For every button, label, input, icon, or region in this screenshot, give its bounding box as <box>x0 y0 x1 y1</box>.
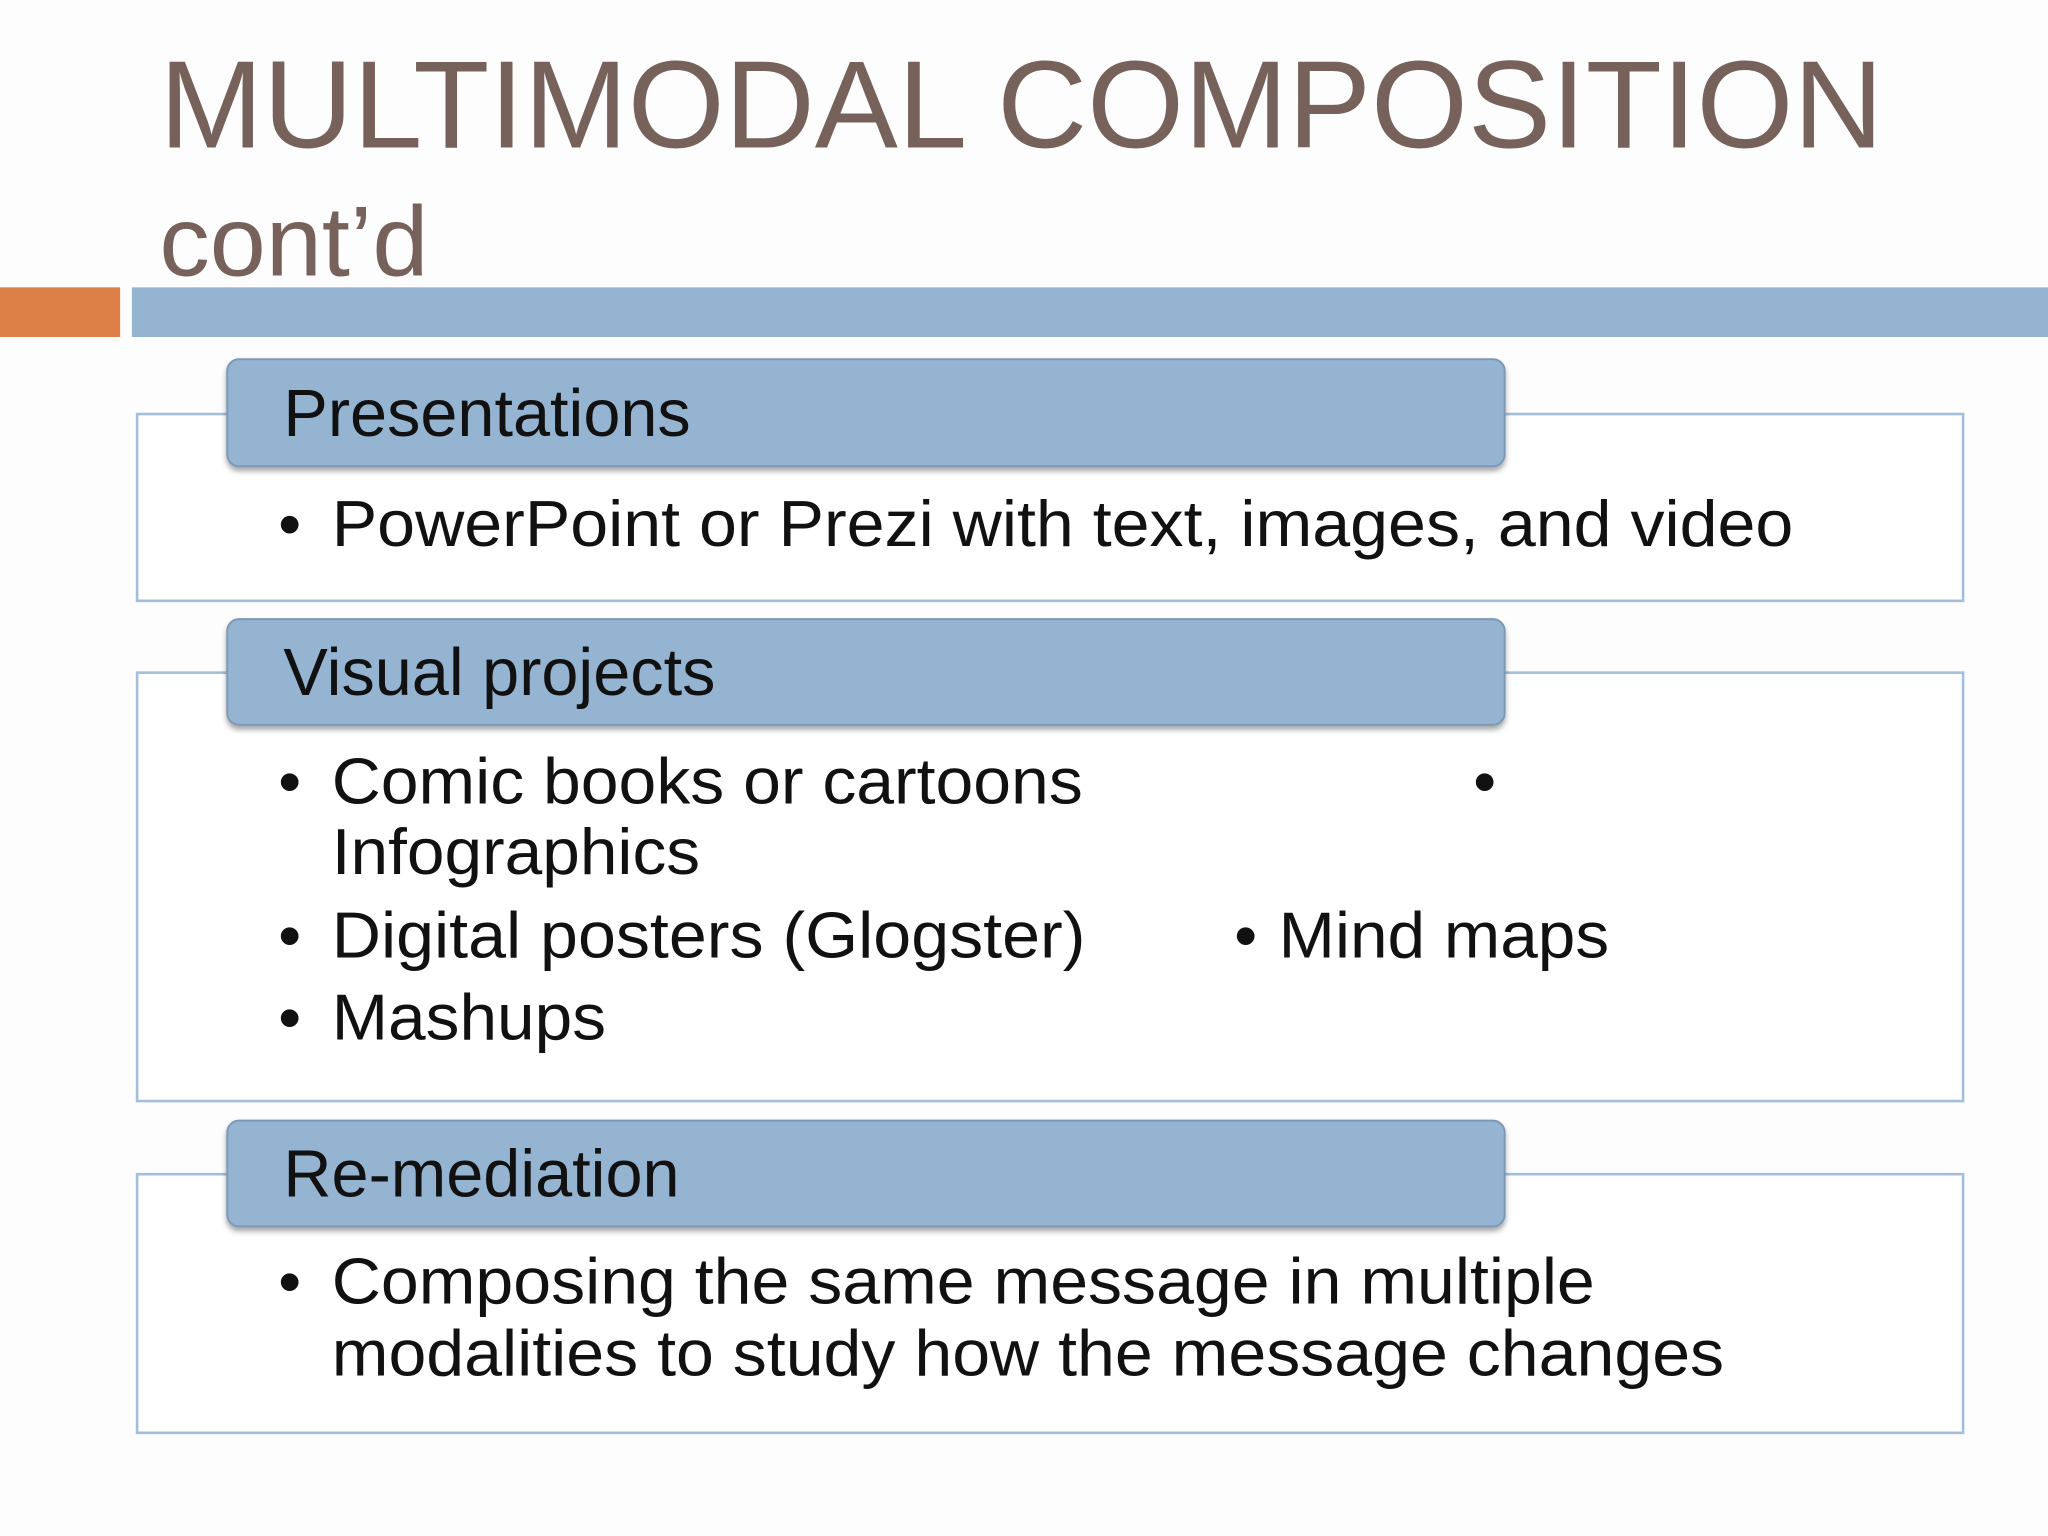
bullet list: Digital posters (Glogster) <box>332 898 1085 971</box>
panel: presentations <box>137 359 1963 601</box>
title <box>159 37 1883 298</box>
header: presentations <box>227 359 1505 466</box>
header: presentations: Presentations <box>283 377 691 451</box>
panel: re-mediation <box>137 1121 1963 1433</box>
bullet text: Composing the same message in multiple <box>332 1245 1595 1318</box>
bullet list: Infographics <box>332 815 700 888</box>
accent bar: orange <box>0 287 120 337</box>
bullet list: • <box>278 744 301 817</box>
bullet text: • <box>278 1245 301 1318</box>
bullet text: modalities to study how the message changes <box>332 1316 1724 1389</box>
bullet text <box>278 1245 1724 1389</box>
bullet list: Mashups <box>332 981 606 1054</box>
bullet list: Comic books or cartoons <box>332 744 1083 817</box>
panel: visual projects <box>137 619 1963 1101</box>
header: visual projects <box>227 619 1505 725</box>
title: cont’d <box>159 187 428 298</box>
bullet list: • <box>278 981 301 1054</box>
bullet list: • <box>1234 898 1257 971</box>
bullet list: • <box>278 898 301 971</box>
title: MULTIMODAL COMPOSITION <box>159 37 1883 175</box>
header: visual projects: Visual projects <box>283 636 715 710</box>
accent bar: blue <box>132 287 2048 337</box>
bullet text: PowerPoint or Prezi with text, images, and video <box>332 487 1793 560</box>
header: re-mediation <box>227 1121 1505 1226</box>
header: re-mediation: Re-mediation <box>283 1137 680 1211</box>
bullet list: • <box>1473 744 1496 817</box>
bullet text: • <box>278 487 301 560</box>
bullet list: Mind maps <box>1279 898 1609 971</box>
bullet list <box>278 744 1609 1054</box>
